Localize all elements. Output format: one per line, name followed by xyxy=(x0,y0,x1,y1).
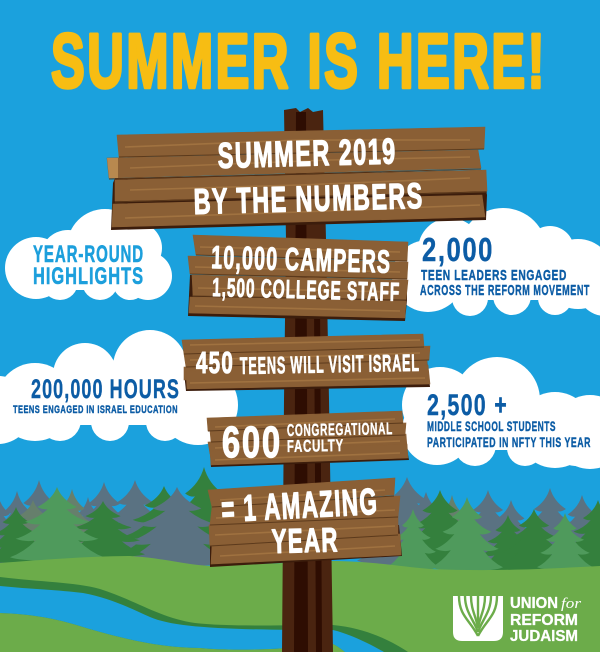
sign text: = 1 amazing: = 1 AMAZING xyxy=(220,481,379,530)
sign text: year: YEAR xyxy=(271,521,339,561)
sign text: 450: 450 xyxy=(196,345,234,380)
sign text: 1,500 college staff: 1,500 COLLEGE STAFF xyxy=(212,272,401,307)
sign text: summer 2019: SUMMER 2019 xyxy=(217,130,397,176)
cloud text: 2,500+ middle school students xyxy=(427,389,591,450)
sign: equals 1 amazing year xyxy=(208,478,402,567)
cloud text: 200,000 hours: 200,000 HOURS xyxy=(31,374,180,404)
forest of trees xyxy=(0,467,600,571)
cloud: 200,000 hours xyxy=(0,330,238,445)
logo wordmark: JUDAISM xyxy=(510,628,578,645)
sign text: 600: 600 xyxy=(222,418,282,467)
sign text: congregational: CONGREGATIONAL xyxy=(287,419,393,440)
sign text: 10,000 campers: 10,000 CAMPERS xyxy=(211,239,392,280)
cloud: 2,500+ middle school students xyxy=(402,357,600,469)
cloud text: 2,000 teen leaders xyxy=(420,231,590,299)
wooden post xyxy=(282,108,333,652)
logo wordmark: for xyxy=(561,596,581,612)
sign: campers and college staff xyxy=(188,235,408,321)
grass ground xyxy=(0,556,600,652)
cloud text: 2,000 teen leaders: 2,000 xyxy=(422,231,494,268)
sign text: by the numbers: BY THE NUMBERS xyxy=(193,175,424,222)
cloud text: 2,500+ middle school students: 2,500 + xyxy=(427,389,508,422)
logo wordmark: REFORM xyxy=(510,612,578,629)
river xyxy=(0,577,408,652)
cloud text: year-round highlights: HIGHLIGHTS xyxy=(33,263,144,290)
cloud text: year-round highlights xyxy=(33,241,144,290)
sign text: teens will visit israel: TEENS WILL VISIT ISRAEL xyxy=(240,350,420,380)
icon: menorah leaf mark xyxy=(453,596,503,641)
sign text: faculty: FACULTY xyxy=(287,436,344,456)
cloud text: year-round highlights: YEAR-ROUND xyxy=(33,241,144,268)
sign: 450 teens will visit israel xyxy=(182,334,430,391)
logo wordmark: UNION xyxy=(510,595,558,612)
cloud text: 200,000 hours xyxy=(13,374,180,416)
cloud text: 200,000 hours: TEENS ENGAGED IN ISRAEL EDUCATION xyxy=(13,404,178,416)
cloud: year-round highlights xyxy=(5,209,172,300)
cloud: 2,000 teen leaders xyxy=(392,208,600,316)
logo wordmark xyxy=(510,595,581,645)
logo: union for reform judaism xyxy=(453,595,581,645)
sign: summer 2019 by the numbers xyxy=(107,127,487,230)
sign: 600 congregational faculty xyxy=(207,411,409,467)
